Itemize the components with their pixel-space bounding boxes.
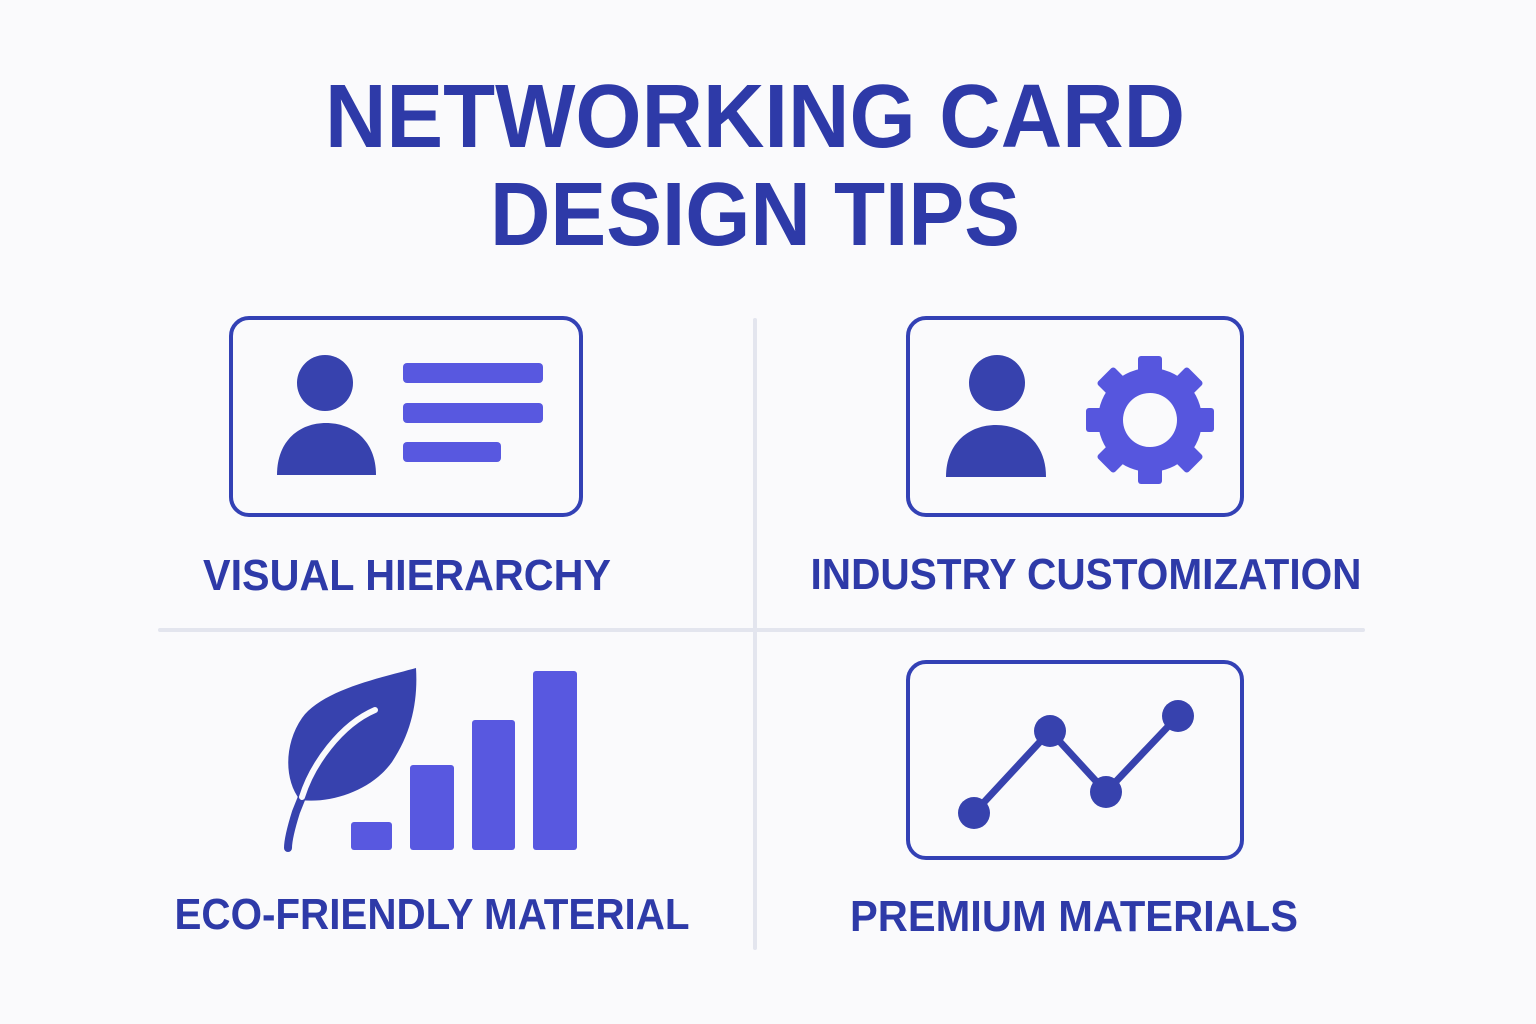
label: visual hierarchy: VISUAL HIERARCHY xyxy=(203,551,611,600)
panel: visual hierarchy xyxy=(203,318,611,600)
icon: leaf xyxy=(288,668,416,848)
icon: profile card with text lines xyxy=(231,318,581,515)
panel: industry customization xyxy=(810,318,1362,599)
title xyxy=(325,67,1185,265)
icon: profile card with gear xyxy=(908,318,1242,515)
label: eco-friendly material: ECO-FRIENDLY MATERIAL xyxy=(174,890,690,939)
title: DESIGN TIPS xyxy=(490,165,1020,265)
title: NETWORKING CARD xyxy=(325,67,1185,167)
panel: premium materials xyxy=(850,662,1298,941)
panel: eco-friendly material xyxy=(174,668,690,939)
label: industry customization: INDUSTRY CUSTOMIZATION xyxy=(810,550,1362,599)
chart: growth bars xyxy=(351,671,577,850)
label: premium materials: PREMIUM MATERIALS xyxy=(850,892,1298,941)
icon: card with line chart xyxy=(908,662,1242,858)
